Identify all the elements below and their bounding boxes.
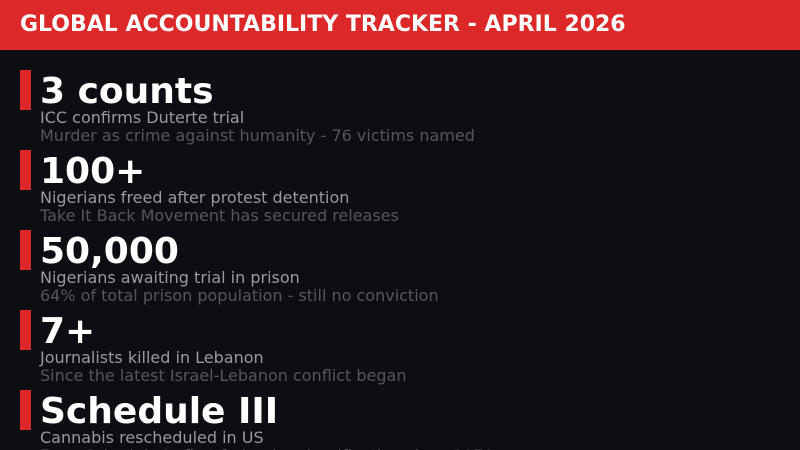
stat detail: Murder as crime against humanity - 76 victims named bbox=[40, 126, 475, 145]
stat label: Nigerians freed after protest detention bbox=[40, 188, 349, 207]
accent bar bbox=[20, 390, 31, 430]
stat: 100+ bbox=[20, 150, 399, 225]
stat label: ICC confirms Duterte trial bbox=[40, 108, 244, 127]
stat detail: 64% of total prison population - still no conviction bbox=[40, 286, 439, 305]
stat number: 50,000 bbox=[40, 231, 179, 272]
stat number: 3 counts bbox=[40, 71, 214, 112]
stat label: Journalists killed in Lebanon bbox=[40, 348, 264, 367]
stat: Schedule III bbox=[20, 390, 494, 450]
stat detail: Since the latest Israel-Lebanon conflict began bbox=[40, 366, 406, 385]
accent bar bbox=[20, 230, 31, 270]
stat label: Nigerians awaiting trial in prison bbox=[40, 268, 300, 287]
title: GLOBAL ACCOUNTABILITY TRACKER - APRIL 2026 bbox=[20, 12, 626, 37]
stat detail: Take It Back Movement has secured releases bbox=[40, 206, 399, 225]
stat number: 7+ bbox=[40, 311, 95, 352]
stat number: 100+ bbox=[40, 151, 145, 192]
accent bar bbox=[20, 70, 31, 110]
accent bar bbox=[20, 310, 31, 350]
accent bar bbox=[20, 150, 31, 190]
stat: 50,000 bbox=[20, 230, 439, 305]
stat: 3 counts bbox=[20, 70, 475, 145]
header bar bbox=[0, 0, 800, 50]
stat number: Schedule III bbox=[40, 391, 278, 432]
stat label: Cannabis rescheduled in US bbox=[40, 428, 264, 447]
stat: 7+ bbox=[20, 310, 406, 385]
